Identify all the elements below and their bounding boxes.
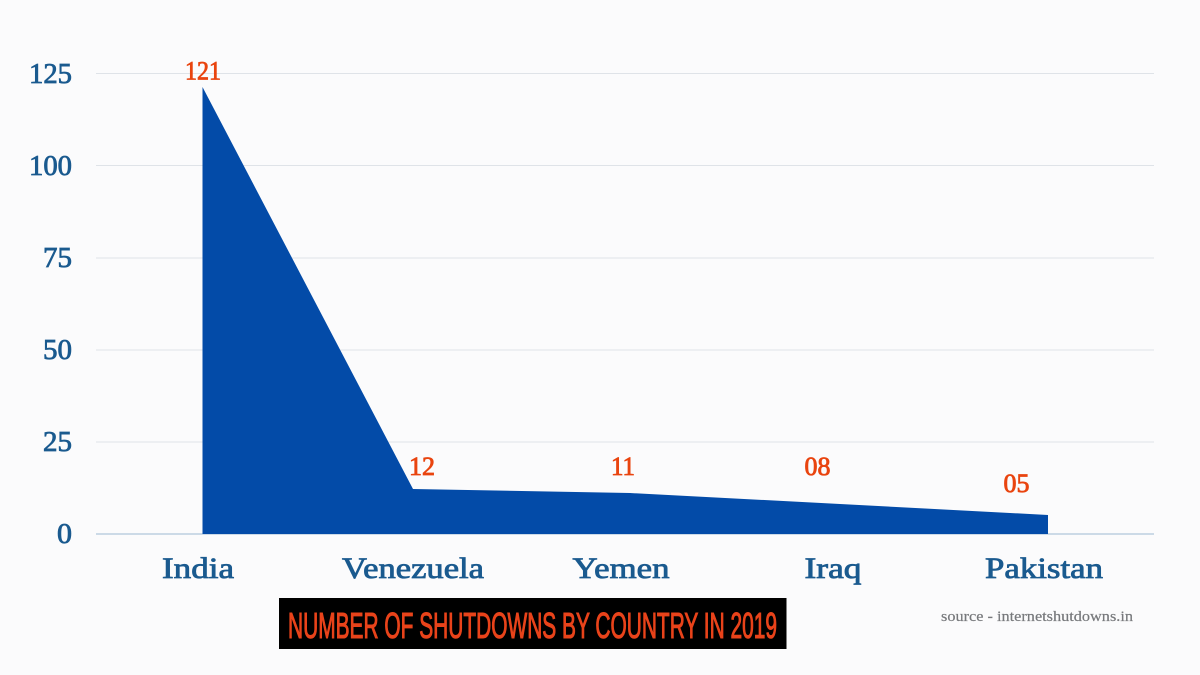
source note: source - internetshutdowns.in (941, 609, 1134, 625)
y axis labels: 100 (29, 150, 72, 182)
y axis labels: 50 (43, 334, 72, 366)
data labels: 05 (1004, 469, 1030, 498)
country labels: Yemen (572, 552, 670, 585)
data labels: 11 (611, 452, 635, 481)
data labels: 12 (409, 452, 435, 481)
country labels: Venezuela (342, 552, 484, 585)
title banner: NUMBER OF SHUTDOWNS BY COUNTRY IN 2019 (288, 605, 777, 646)
title banner (279, 598, 786, 649)
data labels: 121 (185, 56, 221, 86)
y axis labels: 0 (57, 518, 72, 550)
country labels: Pakistan (985, 552, 1103, 585)
data labels: 08 (804, 452, 830, 481)
y axis labels: 75 (43, 242, 72, 274)
y axis labels: 25 (43, 426, 72, 458)
area chart: shutdowns by country (202, 87, 1048, 534)
country labels: Iraq (804, 552, 862, 585)
country labels: India (162, 552, 234, 585)
country labels (162, 552, 1103, 585)
data labels (185, 56, 1030, 498)
y axis labels: 125 (29, 58, 72, 90)
y axis labels (29, 58, 72, 550)
